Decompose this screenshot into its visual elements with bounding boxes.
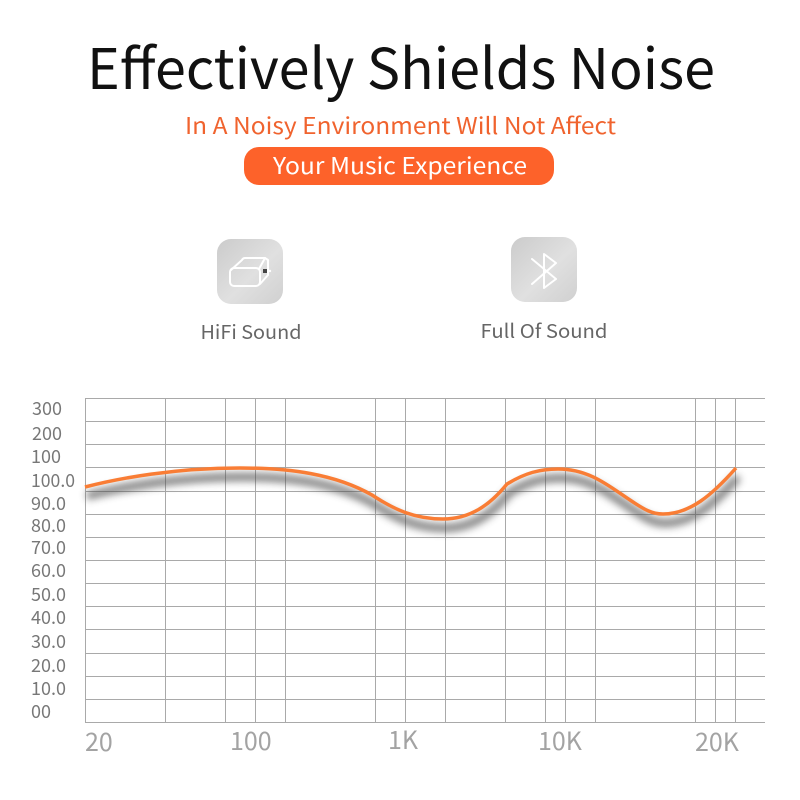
title: Effectively Shields Noise bbox=[87, 25, 715, 106]
y axis labels: 90.0 bbox=[31, 490, 66, 516]
y axis labels: 200 bbox=[32, 420, 62, 446]
y axis labels: 70.0 bbox=[31, 534, 66, 560]
y axis labels: 60.0 bbox=[31, 557, 66, 583]
y axis labels: 100.0 bbox=[31, 467, 75, 493]
badge: your music experience bbox=[244, 147, 554, 185]
y axis labels: 50.0 bbox=[31, 581, 66, 607]
y axis labels: 00 bbox=[31, 698, 51, 724]
y axis labels: 300 bbox=[32, 395, 62, 421]
chart: frequency response bbox=[85, 398, 765, 722]
y axis labels: 40.0 bbox=[31, 604, 66, 630]
x axis labels bbox=[85, 721, 740, 759]
x axis labels: 1K bbox=[388, 721, 419, 757]
icon: hifi sound bbox=[217, 239, 283, 304]
x axis labels: 10K bbox=[538, 722, 583, 758]
x axis labels: 20K bbox=[695, 723, 740, 759]
y axis labels: 80.0 bbox=[31, 512, 66, 538]
x axis labels: 20 bbox=[85, 723, 113, 759]
x axis labels: 100 bbox=[230, 722, 272, 758]
subtitle: In A Noisy Environment Will Not Affect bbox=[185, 107, 616, 141]
y axis labels: 100 bbox=[31, 443, 61, 469]
y axis labels bbox=[31, 395, 75, 724]
icon: bluetooth bbox=[511, 237, 577, 302]
label: full of sound: Full Of Sound bbox=[480, 317, 608, 344]
curve bbox=[85, 468, 736, 519]
curve shadow bbox=[87, 477, 738, 528]
y axis labels: 10.0 bbox=[31, 675, 66, 701]
label: hifi sound: HiFi Sound bbox=[200, 318, 302, 345]
y axis labels: 30.0 bbox=[31, 628, 66, 654]
badge: your music experience: Your Music Experience bbox=[272, 147, 527, 181]
y axis labels: 20.0 bbox=[31, 652, 66, 678]
